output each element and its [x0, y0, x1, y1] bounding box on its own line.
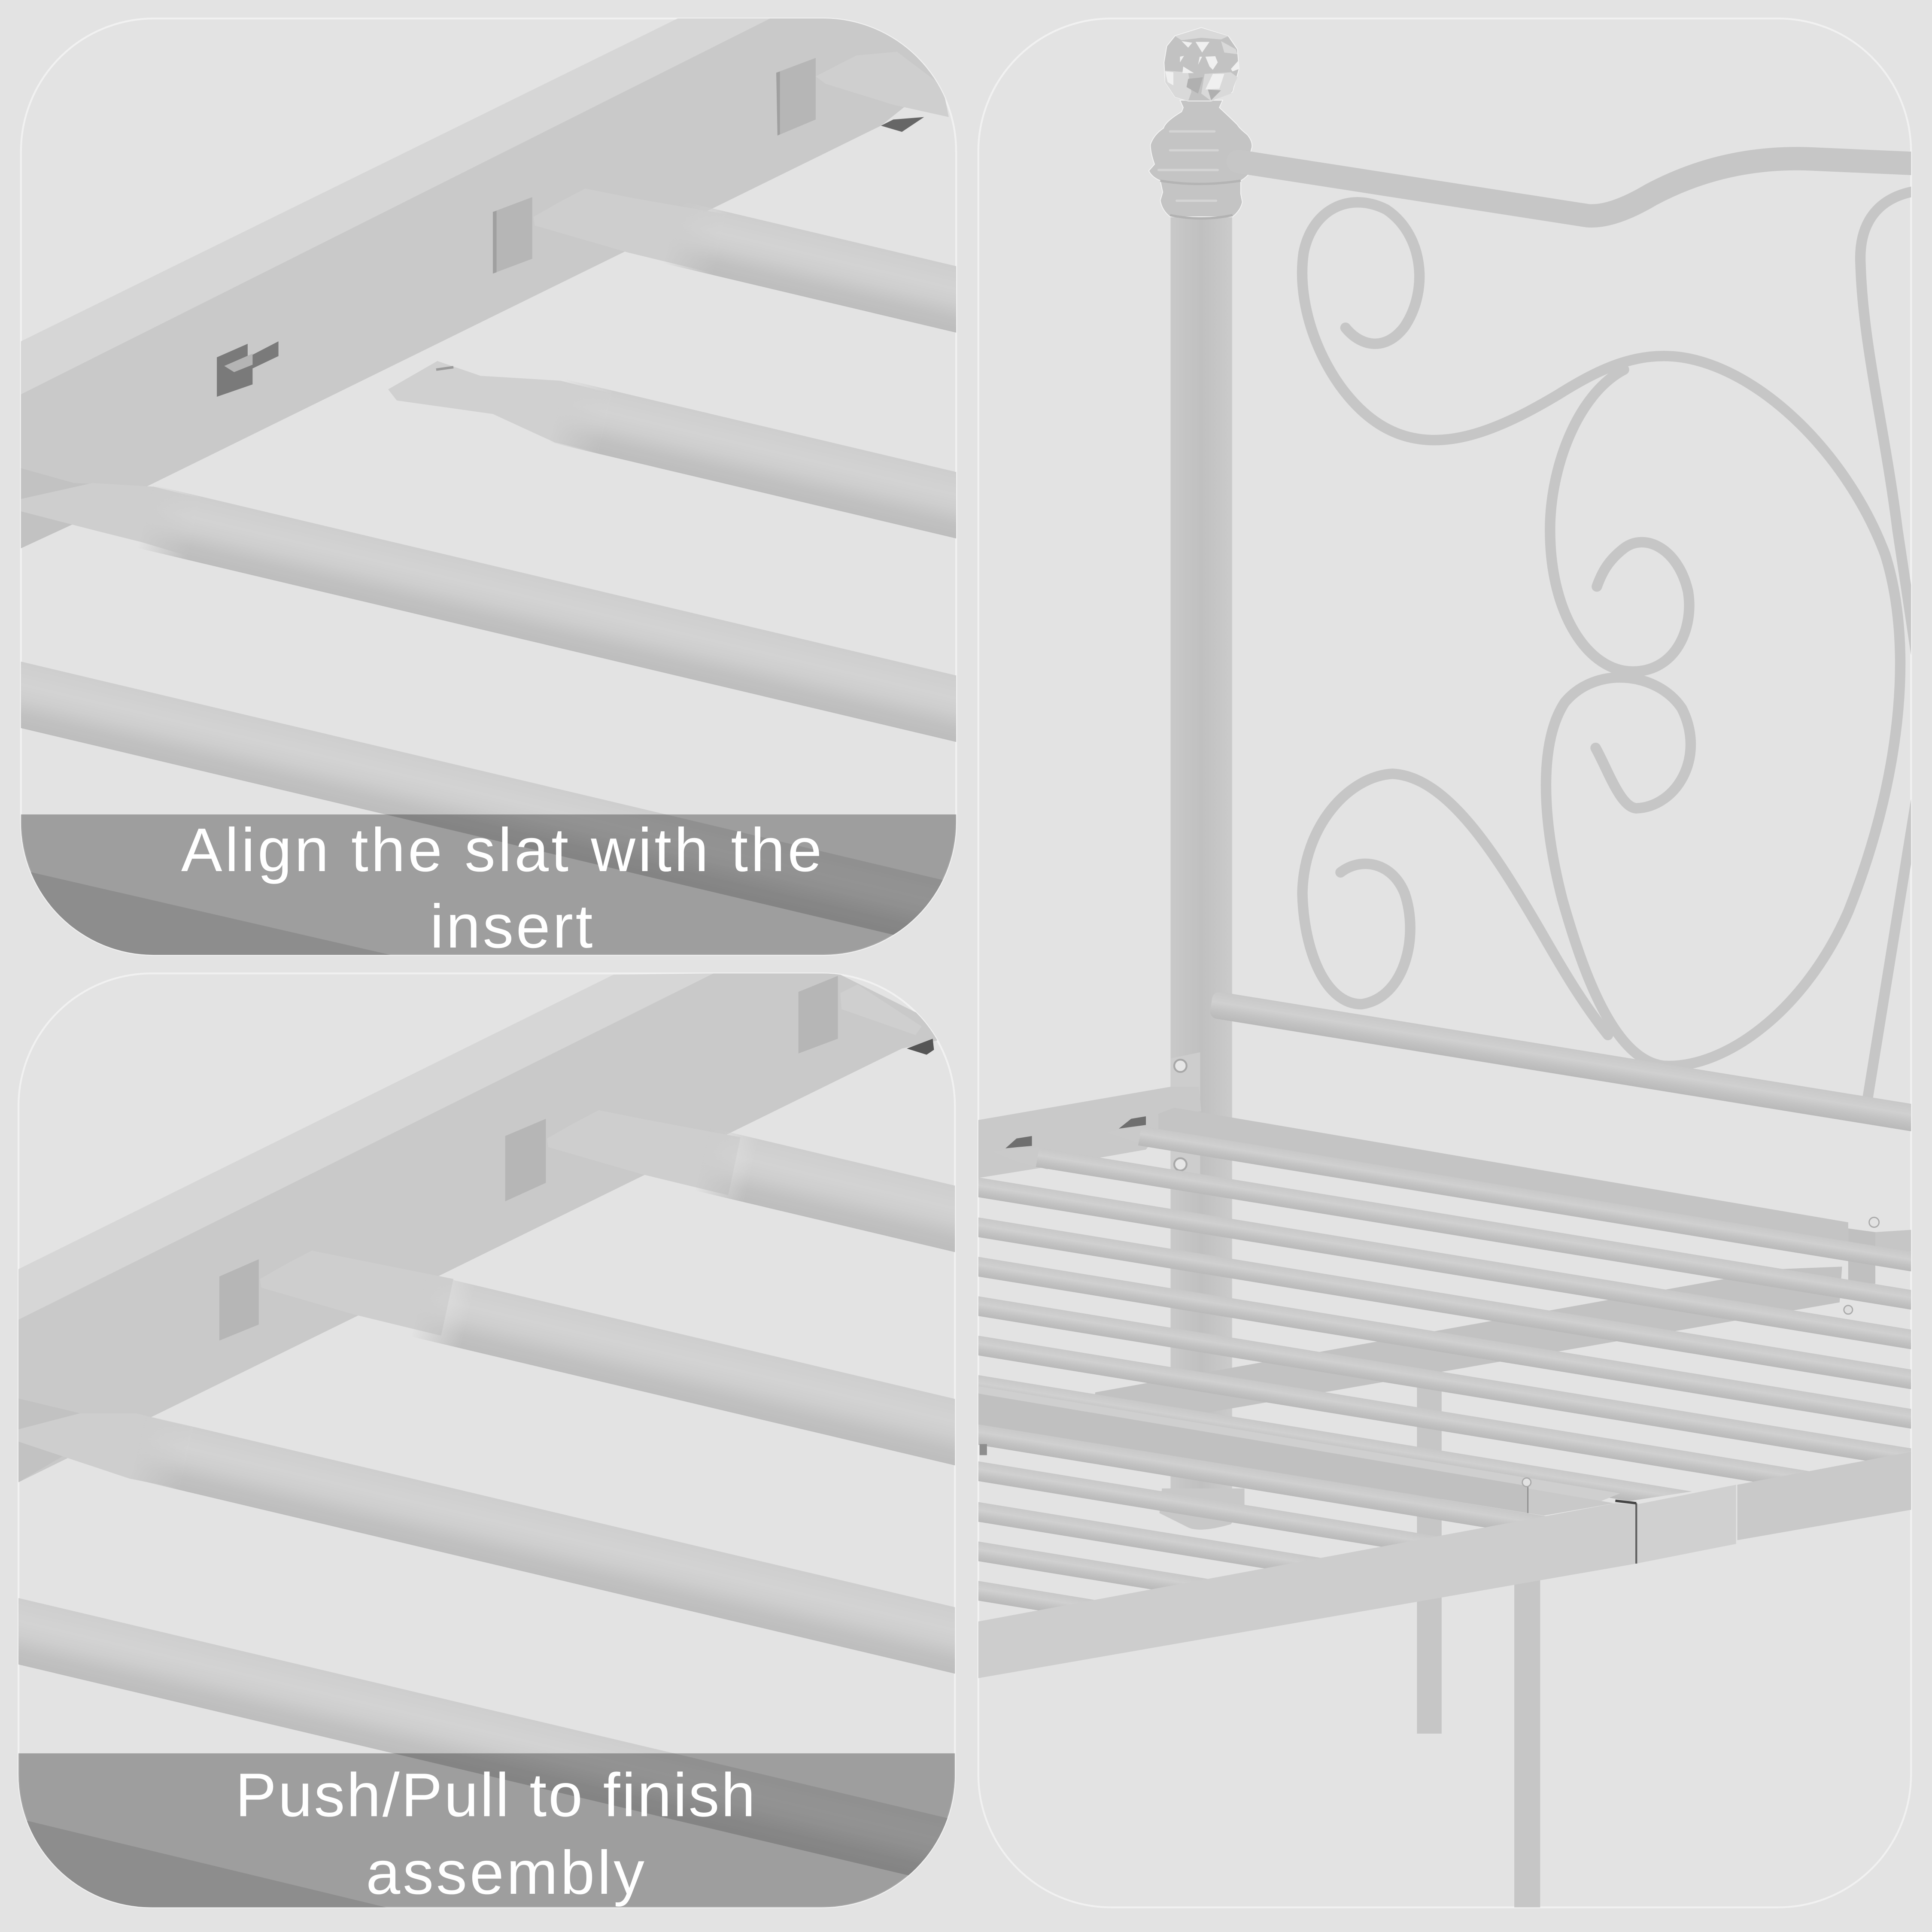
loose slat — [388, 361, 984, 541]
slat 3 — [21, 483, 992, 747]
slat 4 — [2, 1598, 976, 1888]
foot side square tube — [1158, 1108, 1848, 1247]
bed frame beam — [21, 18, 961, 548]
panel: align the slat with the insert — [5, 18, 992, 961]
slat engaged middle — [547, 1110, 979, 1255]
lower rail — [1209, 991, 1931, 1134]
centre support rail — [1084, 1267, 1842, 1433]
caption text — [181, 816, 822, 961]
caption band — [21, 814, 956, 955]
caption text: assembly — [366, 1838, 644, 1907]
far slat — [840, 984, 934, 1055]
slat 5 — [21, 870, 407, 959]
slat engaged lower — [260, 1251, 978, 1467]
tab upper — [776, 58, 816, 136]
side angle rail — [978, 1386, 1620, 1516]
caption text — [235, 1761, 755, 1907]
panel: push/pull to finish assembly — [2, 973, 979, 1912]
finial — [1149, 27, 1252, 219]
insert slot — [217, 341, 279, 397]
far slat — [881, 82, 949, 132]
front rail and sleeve — [978, 1452, 1914, 1678]
tab — [493, 197, 532, 273]
bed post — [1160, 216, 1245, 1530]
slat engaged in tab — [625, 209, 956, 333]
caption text: Align the slat with the — [181, 816, 822, 884]
head side bracket and beam — [978, 1052, 1201, 1189]
panel: bed frame overview — [972, 18, 1932, 1908]
right bracket — [1844, 1217, 1914, 1314]
slats — [972, 1126, 1932, 1758]
top rail — [1238, 158, 1922, 216]
slat 3 — [18, 1413, 973, 1674]
bed frame beam — [18, 973, 961, 1482]
decorative scrolls — [1302, 191, 1916, 1097]
caption text: Push/Pull to finish — [235, 1761, 755, 1829]
slat 4 — [5, 661, 979, 951]
caption text: insert — [430, 892, 592, 961]
slat 5 — [18, 1819, 407, 1912]
tabs — [219, 976, 838, 1340]
support legs — [1417, 1380, 1540, 1908]
caption band — [18, 1753, 955, 1908]
